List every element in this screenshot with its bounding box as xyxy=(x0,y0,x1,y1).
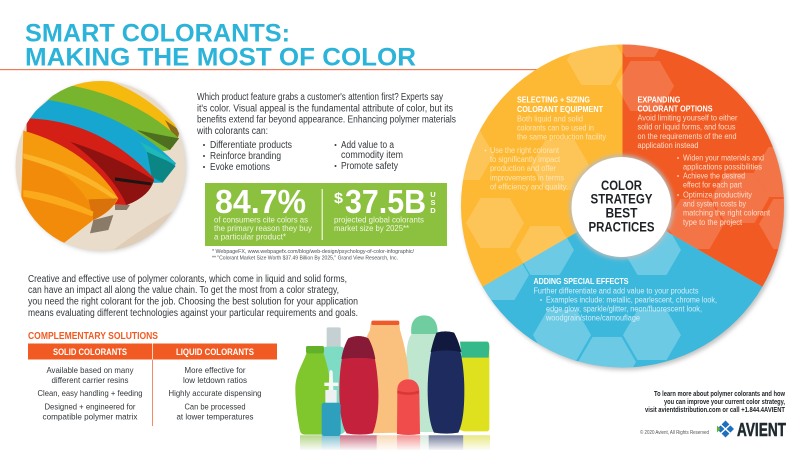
column: solid colorants: Available based on many xyxy=(46,365,134,375)
stat panel xyxy=(205,183,447,246)
text: expanding: Widen your materials and xyxy=(683,154,764,162)
second paragraph: Creative and effective use of polymer colorants, which come in liquid and solid forms, xyxy=(28,274,347,285)
text: expanding: type to the project xyxy=(683,218,743,227)
footnotes xyxy=(212,249,415,262)
sector: adding special effects xyxy=(482,231,762,368)
text: adding xyxy=(534,277,717,322)
second paragraph: you need the right colorant for the job. Choosing the best solution for your application xyxy=(28,296,358,308)
footnotes: ** "Colorant Market Size Worth $37.49 Billion By 2025," Grand View Research, Inc. xyxy=(212,256,398,262)
column: solid colorants: SOLID COLORANTS xyxy=(53,347,127,357)
text: selecting: Use the right colorant xyxy=(490,146,560,155)
title: SMART COLORANTS: xyxy=(25,20,290,48)
text: selecting: colorants can be used in xyxy=(517,124,594,132)
title xyxy=(25,20,416,72)
intro paragraph: benefits extend far beyond appearance. Enhancing polymer materials xyxy=(197,114,456,126)
stat: 84.7% xyxy=(214,183,313,242)
stat: $37.5B: projected global colorants xyxy=(334,214,424,224)
intro paragraph: with colorants can: xyxy=(196,126,268,137)
bullet list: left: Reinforce branding xyxy=(210,151,281,162)
column: liquid colorants: low letdown ratios xyxy=(183,375,247,385)
column: solid colorants xyxy=(38,347,143,422)
stat: $37.5B: S xyxy=(430,198,436,207)
column: solid colorants: different carrier resins xyxy=(52,375,128,385)
column: liquid colorants: Highly accurate dispensing xyxy=(168,388,262,398)
text: selecting: production and offer xyxy=(490,164,556,173)
column: liquid colorants: LIQUID COLORANTS xyxy=(176,347,254,357)
text: adding: Examples include: metallic, pearlescent, chrome look, xyxy=(546,296,717,304)
bullet list: right: commodity item xyxy=(341,150,403,161)
copyright: © 2020 Avient, All Rights Reserved xyxy=(640,429,709,436)
column: liquid colorants: at lower temperatures xyxy=(176,412,254,422)
color strategy wheel xyxy=(460,44,788,372)
second paragraph xyxy=(28,274,358,319)
text: selecting: the same production facility xyxy=(517,132,606,142)
text: expanding: Avoid limiting yourself to either xyxy=(638,114,738,122)
column: solid colorants: Clean, easy handling + feeding xyxy=(38,388,143,398)
photo: colorful kayaks xyxy=(15,77,187,257)
text: adding: woodgrain/stone/camouflage xyxy=(545,314,640,322)
wheel center: COLOR xyxy=(601,178,642,193)
logo: Avient xyxy=(717,420,786,440)
text: expanding: and system costs by xyxy=(683,200,746,208)
text: expanding: matching the right colorant xyxy=(683,208,771,218)
text: expanding: effect for each part xyxy=(683,180,743,190)
text: expanding: EXPANDING xyxy=(638,96,680,104)
stat: $37.5B: $ xyxy=(334,190,344,207)
column: liquid colorants: More effective for xyxy=(184,365,246,375)
text: selecting: Both liquid and solid xyxy=(517,114,583,124)
intro paragraph: Which product feature grabs a customer's attention first? Experts say xyxy=(197,92,443,103)
second paragraph: means evaluating different technologies against your particular requirements and goals. xyxy=(28,308,358,319)
bullet list: right: Add value to a xyxy=(341,140,394,151)
stat: $37.5B: 37.5B xyxy=(345,183,426,220)
text: selecting: of efficiency and quality. xyxy=(490,182,568,192)
stat: $37.5B: D xyxy=(430,206,436,215)
icon: Avient mark xyxy=(717,420,734,438)
text: selecting xyxy=(485,96,606,192)
text: expanding: on the requirements of the end xyxy=(638,132,736,141)
heading: complementary solutions: COMPLEMENTARY SOLUTIONS xyxy=(28,330,158,342)
sector: selecting + sizing equipment xyxy=(460,44,622,287)
text: expanding: Achieve the desired xyxy=(683,172,745,180)
wheel center: BEST xyxy=(606,206,638,220)
column: liquid colorants: Can be processed xyxy=(184,402,246,412)
wheel center: PRACTICES xyxy=(588,220,654,234)
bullet list: left: Evoke emotions xyxy=(210,162,270,173)
text: selecting: COLORANT EQUIPMENT xyxy=(517,105,603,114)
comparison table xyxy=(28,344,277,426)
text: expanding xyxy=(638,96,771,227)
bullet list: left: Differentiate products xyxy=(210,140,292,151)
intro paragraph xyxy=(196,92,456,137)
stat: 84.7%: a particular product* xyxy=(214,232,287,242)
text: expanding: solid or liquid forms, and focus xyxy=(638,122,736,132)
text: expanding: COLORANT OPTIONS xyxy=(638,104,713,114)
logo: Avient: AVIENT xyxy=(737,420,786,440)
footnotes: * WebpageFX, www.webpagefx.com/blog/web-design/psychology-of-color-infographic/ xyxy=(212,249,415,255)
wheel center: STRATEGY xyxy=(590,192,652,206)
stat: $37.5B xyxy=(334,183,436,233)
bullet list: right xyxy=(334,140,403,172)
text: selecting: improvements in terms xyxy=(490,174,564,182)
column: solid colorants: Designed + engineered for xyxy=(44,402,136,412)
text: adding: edge glow, sparkle/glitter, neon/fluorescent look, xyxy=(546,304,702,314)
wheel center xyxy=(570,155,674,259)
photo: plastic bottles xyxy=(295,315,493,450)
text: adding: ADDING SPECIAL EFFECTS xyxy=(534,277,629,286)
text: expanding: application instead xyxy=(638,141,698,150)
text: expanding: applications possibilities xyxy=(683,162,762,172)
text: selecting: to significantly impact xyxy=(490,155,561,164)
second paragraph: can have an impact all along the value chain. To get the most from a color strategy, xyxy=(28,285,339,296)
column: liquid colorants xyxy=(168,347,262,422)
stat: 84.7%: of consumers cite colors as xyxy=(214,214,308,224)
text: expanding: Optimize productivity xyxy=(683,190,752,200)
stat: 84.7%: 84.7% xyxy=(215,183,306,220)
stat: $37.5B: U xyxy=(430,190,436,199)
text: selecting: SELECTING + SIZING xyxy=(517,96,590,104)
column: solid colorants: compatible polymer matrix xyxy=(42,412,138,422)
bullet list: right: Promote safety xyxy=(341,161,398,172)
text: adding: Further differentiate and add value to your products xyxy=(534,286,698,296)
bullet list: left xyxy=(203,140,292,173)
call to action xyxy=(645,391,786,414)
title rule xyxy=(0,69,560,70)
stat: $37.5B: market size by 2025** xyxy=(334,223,410,233)
stat: 84.7%: the primary reason they buy xyxy=(214,223,313,233)
title: MAKING THE MOST OF COLOR xyxy=(25,44,416,72)
intro paragraph: it's color. Visual appeal is the fundamental attribute of color, but its xyxy=(197,104,453,114)
sector: expanding colorant options xyxy=(622,44,784,287)
